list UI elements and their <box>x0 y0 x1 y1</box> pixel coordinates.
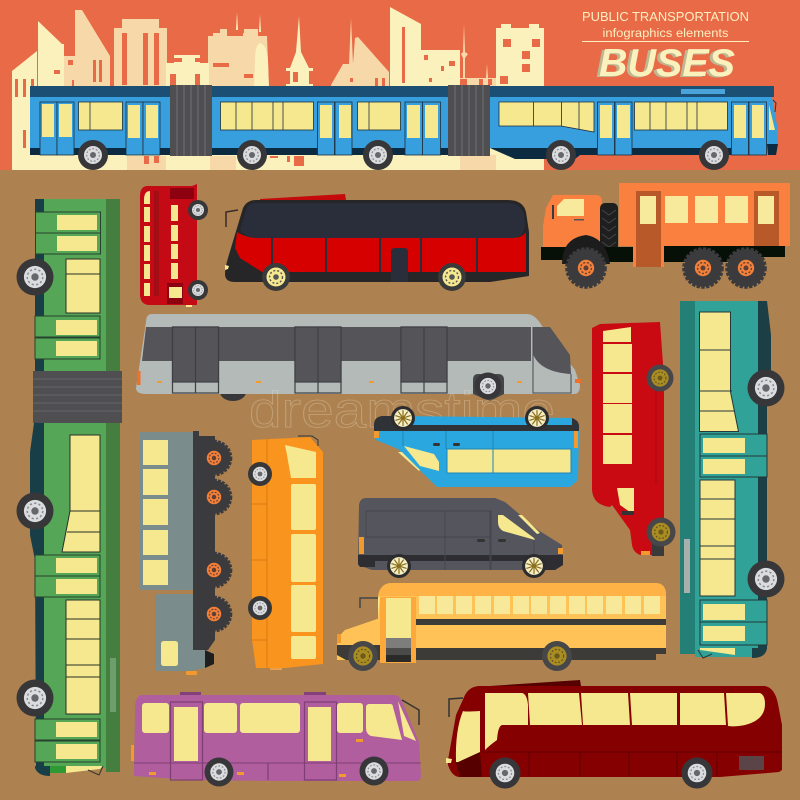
orange bus <box>248 436 323 670</box>
black and red coach <box>225 194 529 291</box>
grey truck bus <box>140 431 231 675</box>
articulated blue bus <box>30 85 778 170</box>
maroon coach <box>446 680 782 788</box>
header sky band <box>0 0 800 170</box>
grey long city bus <box>136 314 581 401</box>
heading: public transportation: PUBLIC TRANSPORTATION <box>582 9 749 24</box>
red bus side view <box>592 322 676 556</box>
red double decker <box>140 184 208 307</box>
orange truck bus <box>541 183 790 288</box>
blue van upside down <box>374 406 579 487</box>
yellow school bus <box>337 583 666 671</box>
teal articulated side bus <box>680 301 784 658</box>
title: buses: BUSES <box>599 42 735 85</box>
green articulated bus (top view side) <box>16 199 122 776</box>
watermark: dreamstime <box>249 382 555 438</box>
title: buses: BUSES <box>596 43 732 86</box>
city skyline <box>12 7 544 170</box>
dark grey van <box>358 498 563 578</box>
subheading: infographics elements <box>602 26 728 40</box>
title block <box>582 9 749 86</box>
purple bus <box>131 692 421 786</box>
